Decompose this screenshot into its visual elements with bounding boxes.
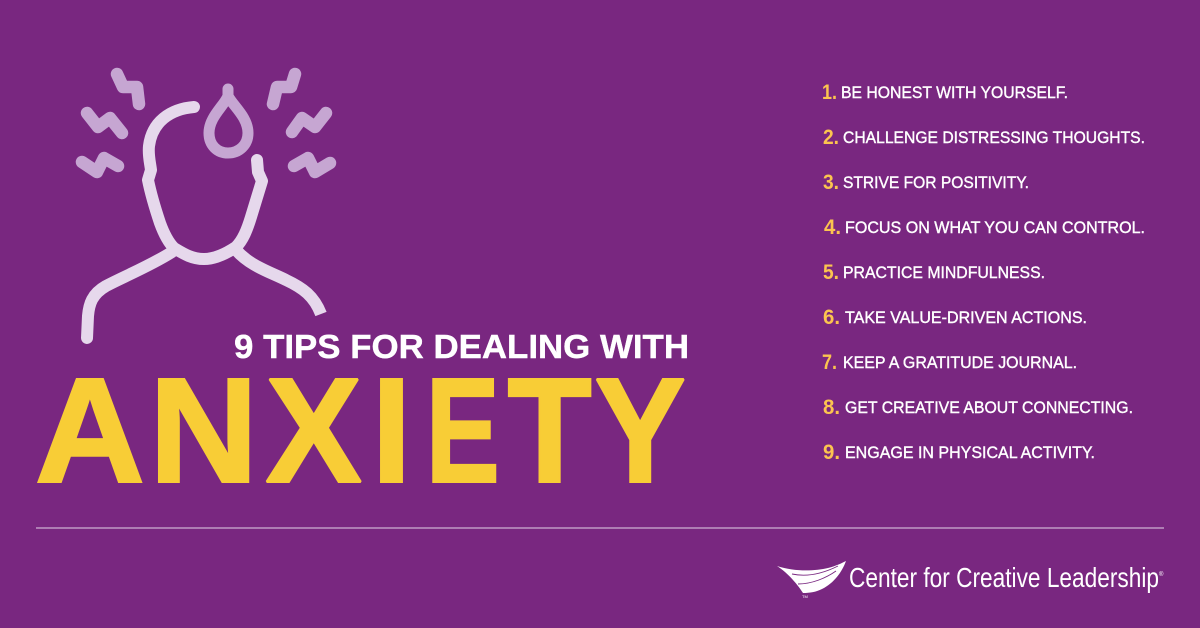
tip 7 bbox=[822, 350, 1077, 374]
icon: leaf logo mark bbox=[777, 561, 846, 599]
tip 9: 9. bbox=[823, 440, 840, 464]
list: nine tips bbox=[822, 80, 1145, 464]
tip 7: 7. bbox=[822, 350, 837, 374]
heading: anxiety: I bbox=[372, 347, 411, 513]
tip 5: PRACTICE MINDFULNESS. bbox=[843, 263, 1045, 282]
tip 7: KEEP A GRATITUDE JOURNAL. bbox=[843, 353, 1077, 372]
heading: anxiety: X bbox=[266, 348, 362, 514]
trademark mark: TM bbox=[802, 594, 808, 599]
icon: stress bolts bbox=[82, 74, 330, 172]
tip 4: 4. bbox=[824, 215, 841, 239]
heading: anxiety bbox=[35, 347, 686, 514]
heading: anxiety: E bbox=[426, 347, 500, 514]
tip 6: TAKE VALUE-DRIVEN ACTIONS. bbox=[845, 308, 1087, 327]
logo: Center for Creative Leadership bbox=[777, 561, 1164, 599]
tip 2: 2. bbox=[823, 125, 839, 149]
tip 5: 5. bbox=[823, 260, 839, 284]
tip 9: ENGAGE IN PHYSICAL ACTIVITY. bbox=[845, 443, 1095, 462]
heading: anxiety: T bbox=[508, 348, 592, 514]
tip 6: 6. bbox=[823, 305, 840, 329]
tip 1: BE HONEST WITH YOURSELF. bbox=[841, 83, 1068, 102]
tip 8 bbox=[823, 395, 1133, 419]
tip 3: 3. bbox=[823, 170, 839, 194]
tip 6 bbox=[823, 305, 1087, 329]
heading: anxiety: Y bbox=[594, 347, 686, 514]
registered mark: ® bbox=[1159, 571, 1164, 578]
heading: 9 tips for dealing with: 9 TIPS FOR DEALING WITH bbox=[234, 329, 689, 366]
tip 5 bbox=[823, 260, 1045, 284]
tip 1: 1. bbox=[822, 80, 837, 104]
heading: anxiety: A bbox=[35, 347, 145, 513]
icon: anxious head with stress bolts bbox=[82, 74, 330, 338]
tip 2 bbox=[823, 125, 1145, 149]
tip 1 bbox=[822, 80, 1068, 104]
heading: anxiety: N bbox=[149, 347, 258, 514]
tip 3 bbox=[823, 170, 1029, 194]
tip 8: 8. bbox=[823, 395, 840, 419]
tip 9 bbox=[823, 440, 1095, 464]
tip 2: CHALLENGE DISTRESSING THOUGHTS. bbox=[843, 128, 1145, 147]
tip 4: FOCUS ON WHAT YOU CAN CONTROL. bbox=[845, 218, 1145, 237]
tip 8: GET CREATIVE ABOUT CONNECTING. bbox=[845, 398, 1133, 417]
icon: head and shoulders outline bbox=[87, 107, 321, 338]
tip 3: STRIVE FOR POSITIVITY. bbox=[843, 173, 1029, 192]
icon: sweat drop bbox=[209, 89, 248, 153]
